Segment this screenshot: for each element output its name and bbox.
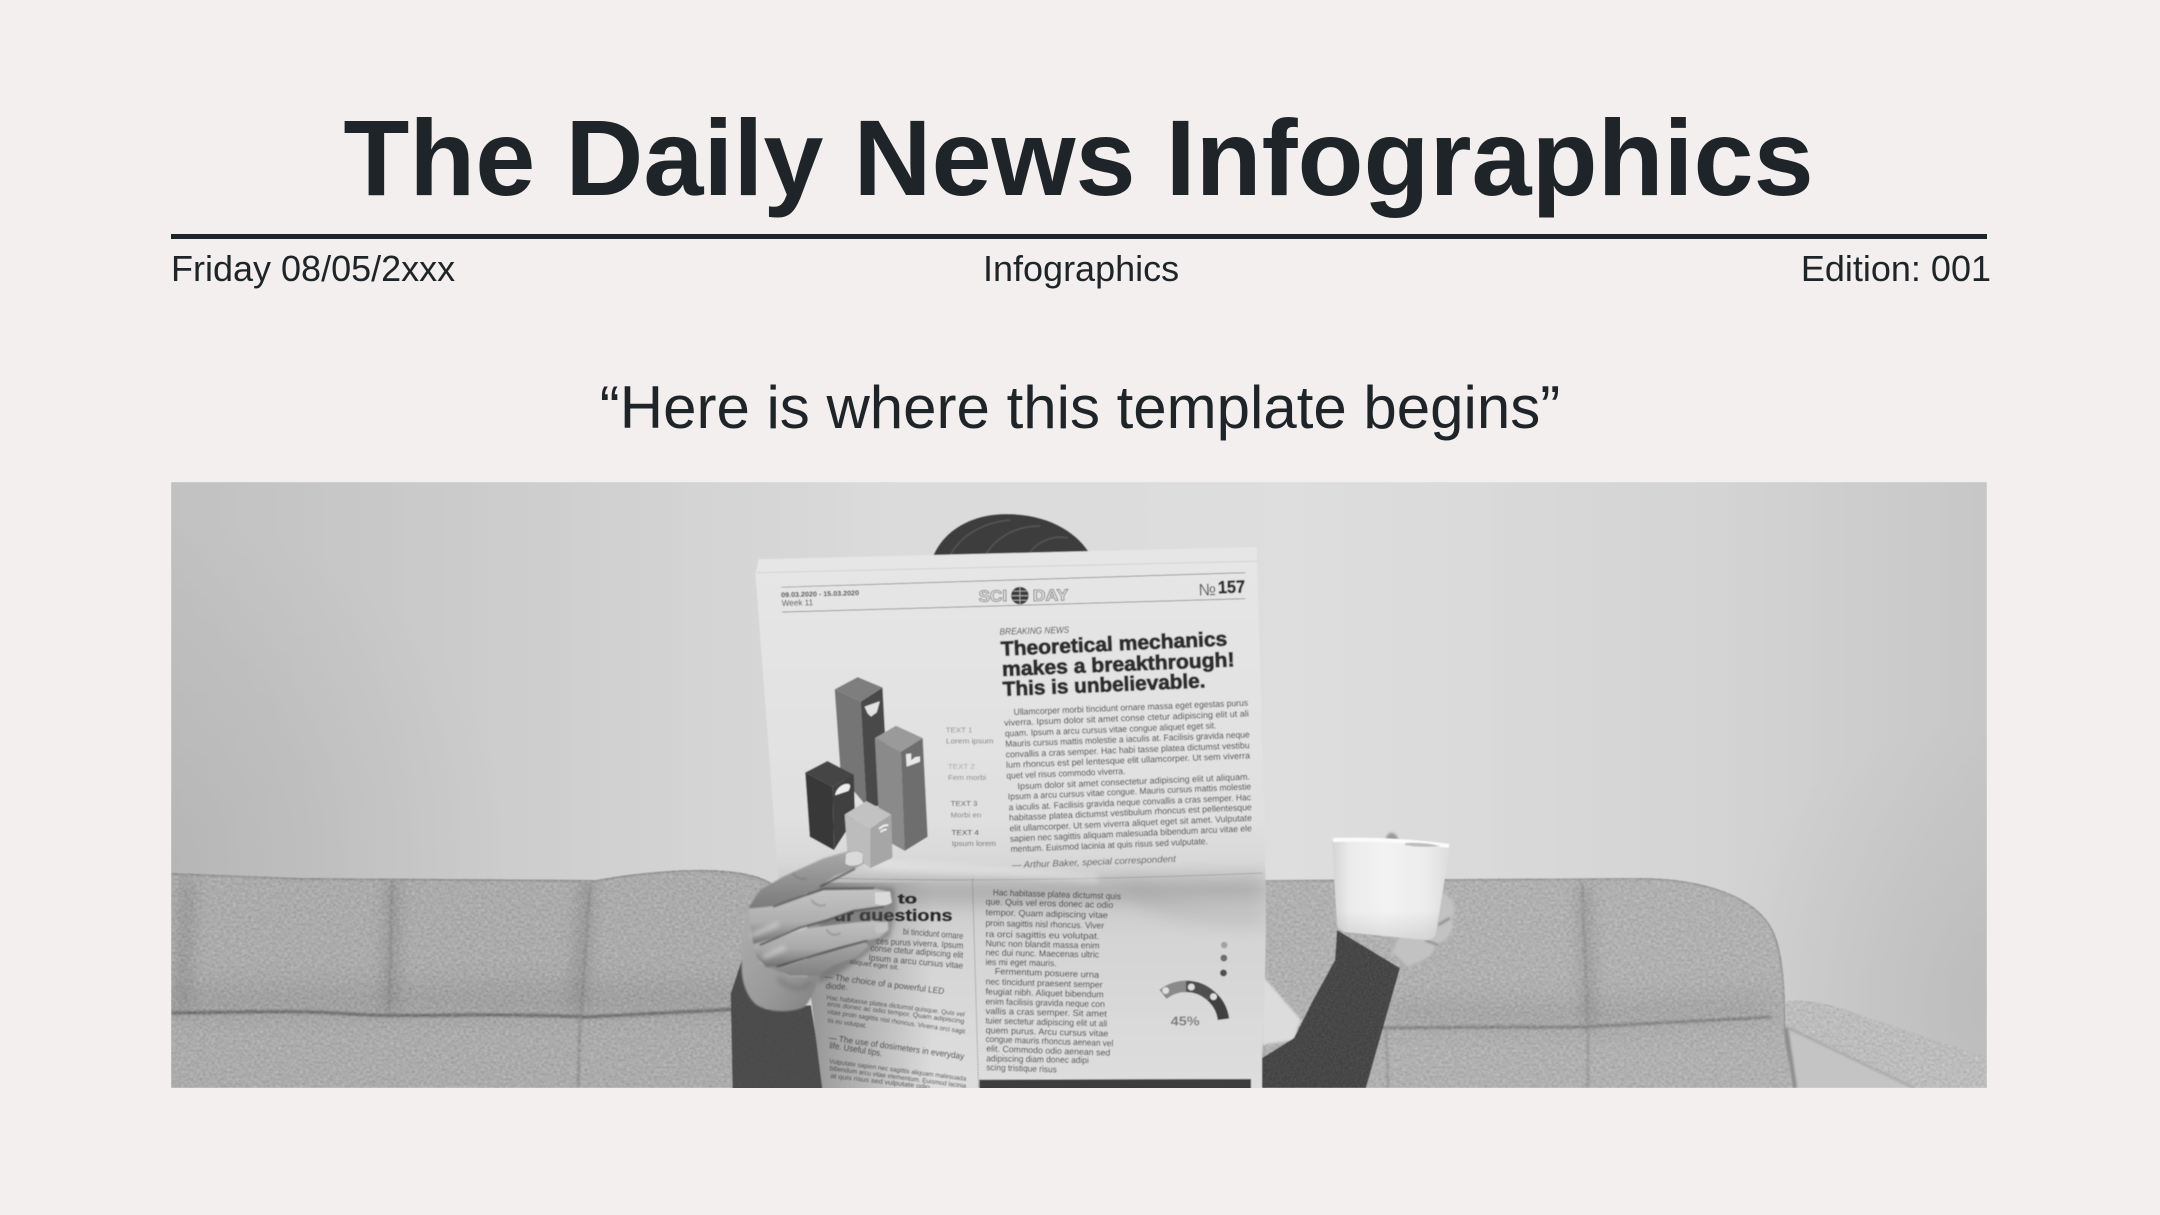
- lower left small print: Hac habitasse platea dictumst quisque. Quis vel: [826, 994, 966, 1019]
- masthead: 09.03.2020 - 15.03.2020: [781, 590, 859, 599]
- lower left small print: eros donec ac odio tempor. Quam adipiscing: [827, 1001, 965, 1025]
- lower right article column: tuier sectetur adipiscing elit ut ali: [985, 1015, 1107, 1028]
- masthead: 157: [1218, 576, 1246, 597]
- newspaper article body: lum rhoncus est pel lentesque elit ullamcorper. Ut sem viverra: [1006, 750, 1250, 770]
- byline: — Arthur Baker, special correspondent: [1011, 854, 1176, 870]
- lower left article: diode.: [825, 981, 848, 992]
- header rule: [171, 234, 1987, 239]
- masthead: №: [1198, 580, 1216, 600]
- knuckle highlights and shadows: [753, 873, 840, 988]
- lower left small print: bibendum arcu vitae elementum. Euismod lacinia: [829, 1065, 967, 1090]
- photo: person reading a newspaper on a sofa: [171, 482, 1987, 1088]
- newspaper headline: This is unbelievable.: [1002, 670, 1206, 701]
- lower left article: ces purus viverra. Ipsum: [876, 936, 964, 950]
- newspaper article body: Ipsum dolor sit amet consectetur adipiscing elit ut aliquam.: [1017, 772, 1250, 791]
- newspaper article body: a iaculis at. Facilisis gravida neque convallis a cras semper. Hac: [1008, 792, 1252, 812]
- lower left article: bi tincidunt ornare: [903, 926, 964, 941]
- lower right article column: ra orci sagittis eu volutpat.: [985, 929, 1100, 941]
- creases between fingers: [760, 869, 884, 967]
- chart labels: TEXT 4: [951, 828, 980, 837]
- masthead: DAY: [1033, 586, 1069, 605]
- left hand holding the paper: [741, 852, 897, 1011]
- chart labels: TEXT 2: [948, 762, 975, 771]
- lower right article column: congue mauris rhoncus aenean vel: [985, 1034, 1113, 1048]
- newspaper headline: makes a breakthrough!: [1002, 649, 1235, 681]
- icon: columns: [906, 753, 920, 767]
- newspaper article body: quet vel risus commodo viverra.: [1006, 766, 1125, 781]
- lower right article column: vallis a cras semper. Sit amet: [985, 1006, 1107, 1019]
- newspaper article body: quam. Ipsum a arcu cursus vitae congue aliquet eget sit.: [1005, 720, 1216, 738]
- newspaper article body: Mauris cursus mattis molestie a iaculis at. Facilisis gravida neque: [1005, 729, 1250, 749]
- lower left small print: at quis risus sed vulputate odio: [830, 1073, 931, 1091]
- lower right article column: tempor. Quam adipiscing vitae: [985, 907, 1108, 920]
- edition: Edition: 001: [1801, 248, 1991, 289]
- middle finger: [748, 889, 892, 944]
- lower left article: — The choice of a powerful LED: [824, 971, 945, 996]
- sofa arm: [1786, 1001, 1987, 1088]
- lower right article column: Nunc non blandit massa enim: [985, 938, 1100, 951]
- chart labels: Morbi en: [951, 811, 981, 820]
- lower right article column: nec tincidunt praesent semper: [985, 976, 1103, 990]
- date: Friday 08/05/2xxx: [171, 248, 455, 289]
- fingernails: [845, 852, 892, 933]
- lower right article column: proin sagittis nisl rhoncus. Viver: [985, 918, 1104, 931]
- lower left article: [824, 926, 964, 996]
- gauge chart: [1162, 984, 1223, 1019]
- right arm sleeve: [1262, 930, 1400, 1088]
- lower left headline: [834, 894, 952, 922]
- masthead: Week 11: [782, 597, 814, 608]
- icon: cloud: [835, 784, 850, 795]
- sofa right: [1260, 870, 1800, 1088]
- lower right article column: Hac habitasse platea dictumst quis: [993, 887, 1122, 901]
- lower right article column: nec dui nunc. Maecenas ultric: [985, 947, 1100, 960]
- newspaper page: [755, 547, 1266, 1089]
- newspaper article body: sapien nec sagittis aliquam malesuada bibendum arcu vitae ele: [1010, 823, 1252, 844]
- newspaper article body: habitasse platea dictumst vestibulum rhoncus est pellentesque: [1009, 802, 1252, 823]
- masthead: [781, 573, 1246, 612]
- ring finger: [753, 921, 889, 967]
- back of hand: [740, 924, 816, 1012]
- right hand: [1384, 833, 1454, 966]
- lower left small print: Vulputate sapien nec sagittis aliquam malesuada: [829, 1058, 967, 1083]
- newspaper article body: elit ullamcorper. Ut sem viverra aliquet eget sit amet. Vulputate: [1009, 813, 1252, 833]
- newspaper article body: Ullamcorper morbi tincidunt ornare massa eget egestas purus: [1013, 698, 1249, 717]
- lower right article column: adipiscing diam donec adipi: [986, 1053, 1089, 1065]
- kicker: BREAKING NEWS: [999, 625, 1070, 637]
- lower left article: aliquet eget sit.: [849, 959, 900, 972]
- sofa left: [171, 865, 811, 1088]
- dark image strip at page bottom: [978, 1078, 1252, 1088]
- legend dots: [1220, 942, 1227, 976]
- lower left subheading: life. Useful tips.: [829, 1040, 883, 1058]
- left sleeve and newspaper, drawn in local coordinates: [731, 547, 1266, 1091]
- lower left subheading: — The use of dosimeters in everyday: [828, 1032, 966, 1061]
- lower left small print: tis eu volutpat.: [827, 1017, 867, 1030]
- chart labels: TEXT 1: [946, 725, 972, 734]
- chart labels: Ipsum lorem: [952, 839, 996, 848]
- left sleeve: [731, 959, 824, 1089]
- chart labels: Fem morbi: [948, 773, 987, 782]
- coffee mug: [1332, 840, 1450, 940]
- lower left small print: vitae proin sagittis nisl rhoncus. Viverra orci sagit: [827, 1009, 966, 1036]
- title: The Daily News Infographics: [343, 97, 1814, 218]
- newspaper article body: [1004, 698, 1252, 854]
- lower left headline: to: [898, 892, 917, 907]
- gauge value: 45%: [1171, 1014, 1200, 1028]
- newspaper article body: convallis a cras semper. Hac habi tasse platea dictumst vestibu: [1005, 740, 1250, 760]
- chart labels: TEXT 3: [951, 799, 977, 808]
- shadow cast on the paper: [818, 887, 897, 983]
- chart labels: Lorem ipsum: [946, 737, 993, 746]
- lower right article column: Fermentum posuere urna: [995, 966, 1099, 980]
- lower right article column: scing tristique risus: [986, 1062, 1057, 1074]
- lower right article column: ies mi eget mauris.: [985, 957, 1057, 968]
- icon: wifi: [879, 825, 888, 832]
- lower right article column: [985, 887, 1122, 1074]
- lower left small print: [826, 994, 967, 1091]
- lower right article column: elit. Commodo odio aenean sed: [986, 1043, 1111, 1058]
- lower left article: conse ctetur adipiscing elit: [870, 943, 964, 960]
- bar chart: isometric columns: [805, 677, 928, 868]
- lower right article column: enim facilisis gravida neque con: [985, 996, 1105, 1009]
- index finger: [748, 852, 864, 908]
- newspaper headline: Theoretical mechanics: [1000, 628, 1228, 661]
- lower right article column: quem purus. Arcu cursus vitae: [985, 1025, 1109, 1038]
- masthead: SCI: [978, 587, 1007, 606]
- lower right article column: feugiat nibh. Aliquet bibendum: [985, 986, 1104, 999]
- newspaper article body: mentum. Euismod lacinia at quis risus sed vulputate.: [1010, 836, 1208, 854]
- newspaper headline: [1000, 628, 1235, 701]
- newspaper article body: Ipsum a arcu cursus vitae congue. Mauris cursus mattis molestie: [1008, 781, 1251, 802]
- newspaper article body: viverra. Ipsum dolor sit amet conse ctetur adipiscing elit ut ali: [1004, 708, 1249, 728]
- lower left headline: ur questions: [834, 906, 953, 925]
- lower left article: Ipsum a arcu cursus vitae: [868, 952, 964, 971]
- icon: cart: [865, 701, 880, 717]
- column divider: [972, 879, 979, 1088]
- wall background: [171, 482, 1987, 1088]
- section label: Infographics: [983, 248, 1179, 289]
- shirt under right sleeve: [1262, 975, 1301, 1045]
- little finger: [767, 941, 869, 976]
- chart labels: [946, 725, 996, 848]
- lower right article column: que. Quis vel eros donec ac odio: [985, 896, 1114, 910]
- hair of the reader: [933, 514, 1088, 556]
- quote: “Here is where this template begins”: [600, 374, 1560, 441]
